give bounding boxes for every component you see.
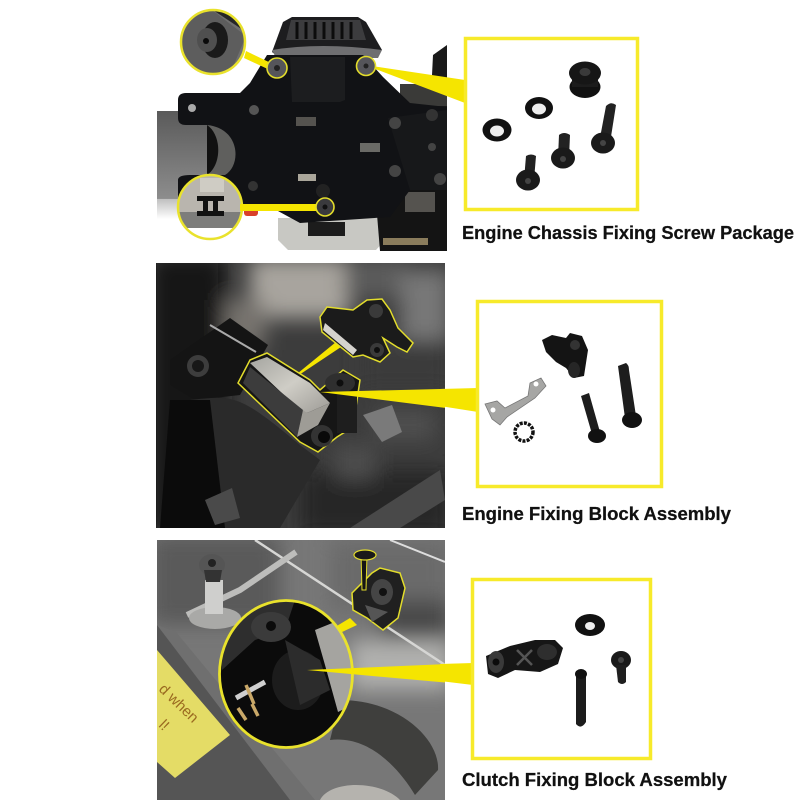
grey engine bar — [157, 111, 207, 199]
lower bracket — [205, 488, 240, 525]
right side dark parts — [432, 45, 447, 107]
icon: countersunk washer — [575, 614, 605, 636]
icon: rubber grommet — [569, 62, 601, 98]
rod lines — [255, 540, 445, 665]
yellow warning label: l! — [155, 717, 172, 734]
icon: two screws — [581, 363, 642, 443]
arrow: beam to parts box — [308, 664, 445, 682]
plate slots and screws — [188, 104, 446, 198]
zoom circle with dark clutch — [220, 600, 352, 748]
heading: clutch fixing block assembly: Clutch Fixing Block Assembly — [462, 769, 728, 790]
dark bracket and plate — [204, 318, 268, 398]
arrow: small leader pointer — [338, 618, 357, 632]
icon: long screw — [575, 669, 587, 727]
exposed clutch drum — [207, 125, 236, 175]
icon: clutch arm — [486, 640, 563, 678]
icon: metal plate — [485, 378, 546, 425]
black chassis plate — [178, 55, 447, 223]
yellow warning label: d when — [155, 681, 202, 726]
infographic canvas — [156, 8, 794, 800]
panel: engine chassis photo — [157, 17, 447, 251]
diagonal housing — [157, 625, 300, 800]
callout: bottom-left zoom lens — [178, 175, 242, 240]
main outlined block — [238, 353, 360, 452]
arrow: beam to parts box — [320, 388, 445, 408]
panel: engine block parts box — [478, 302, 662, 486]
red engine knob — [244, 208, 258, 216]
marker circles and leader lines — [240, 51, 465, 216]
screw post with T-bar — [187, 552, 296, 629]
callout: top-left zoom lens — [180, 10, 246, 74]
panel: chassis screw parts box — [466, 38, 638, 210]
icon: L bracket block — [542, 333, 588, 378]
icon: countersunk washers — [482, 97, 553, 142]
outlined clutch block — [352, 550, 405, 630]
icon: short screw — [611, 651, 631, 684]
lower engine casting — [278, 218, 385, 250]
yellow warning label — [155, 650, 230, 778]
heading: engine fixing block assembly: Engine Fixing Block Assembly — [462, 503, 732, 524]
panel: clutch fixing block photo — [157, 540, 445, 800]
icon: star washer — [515, 423, 533, 441]
icon: screws — [516, 103, 616, 190]
background blur shapes — [150, 535, 450, 690]
panel: clutch block parts box — [472, 580, 650, 758]
arrow: small leader pointer — [299, 343, 340, 374]
heading: engine chassis fixing screw package: Engine Chassis Fixing Screw Package — [462, 222, 794, 243]
engine pull-start cover — [272, 17, 382, 54]
background blur shapes — [150, 255, 450, 535]
upper outlined assembled part — [320, 299, 413, 362]
panel: engine fixing block photo — [156, 263, 445, 528]
